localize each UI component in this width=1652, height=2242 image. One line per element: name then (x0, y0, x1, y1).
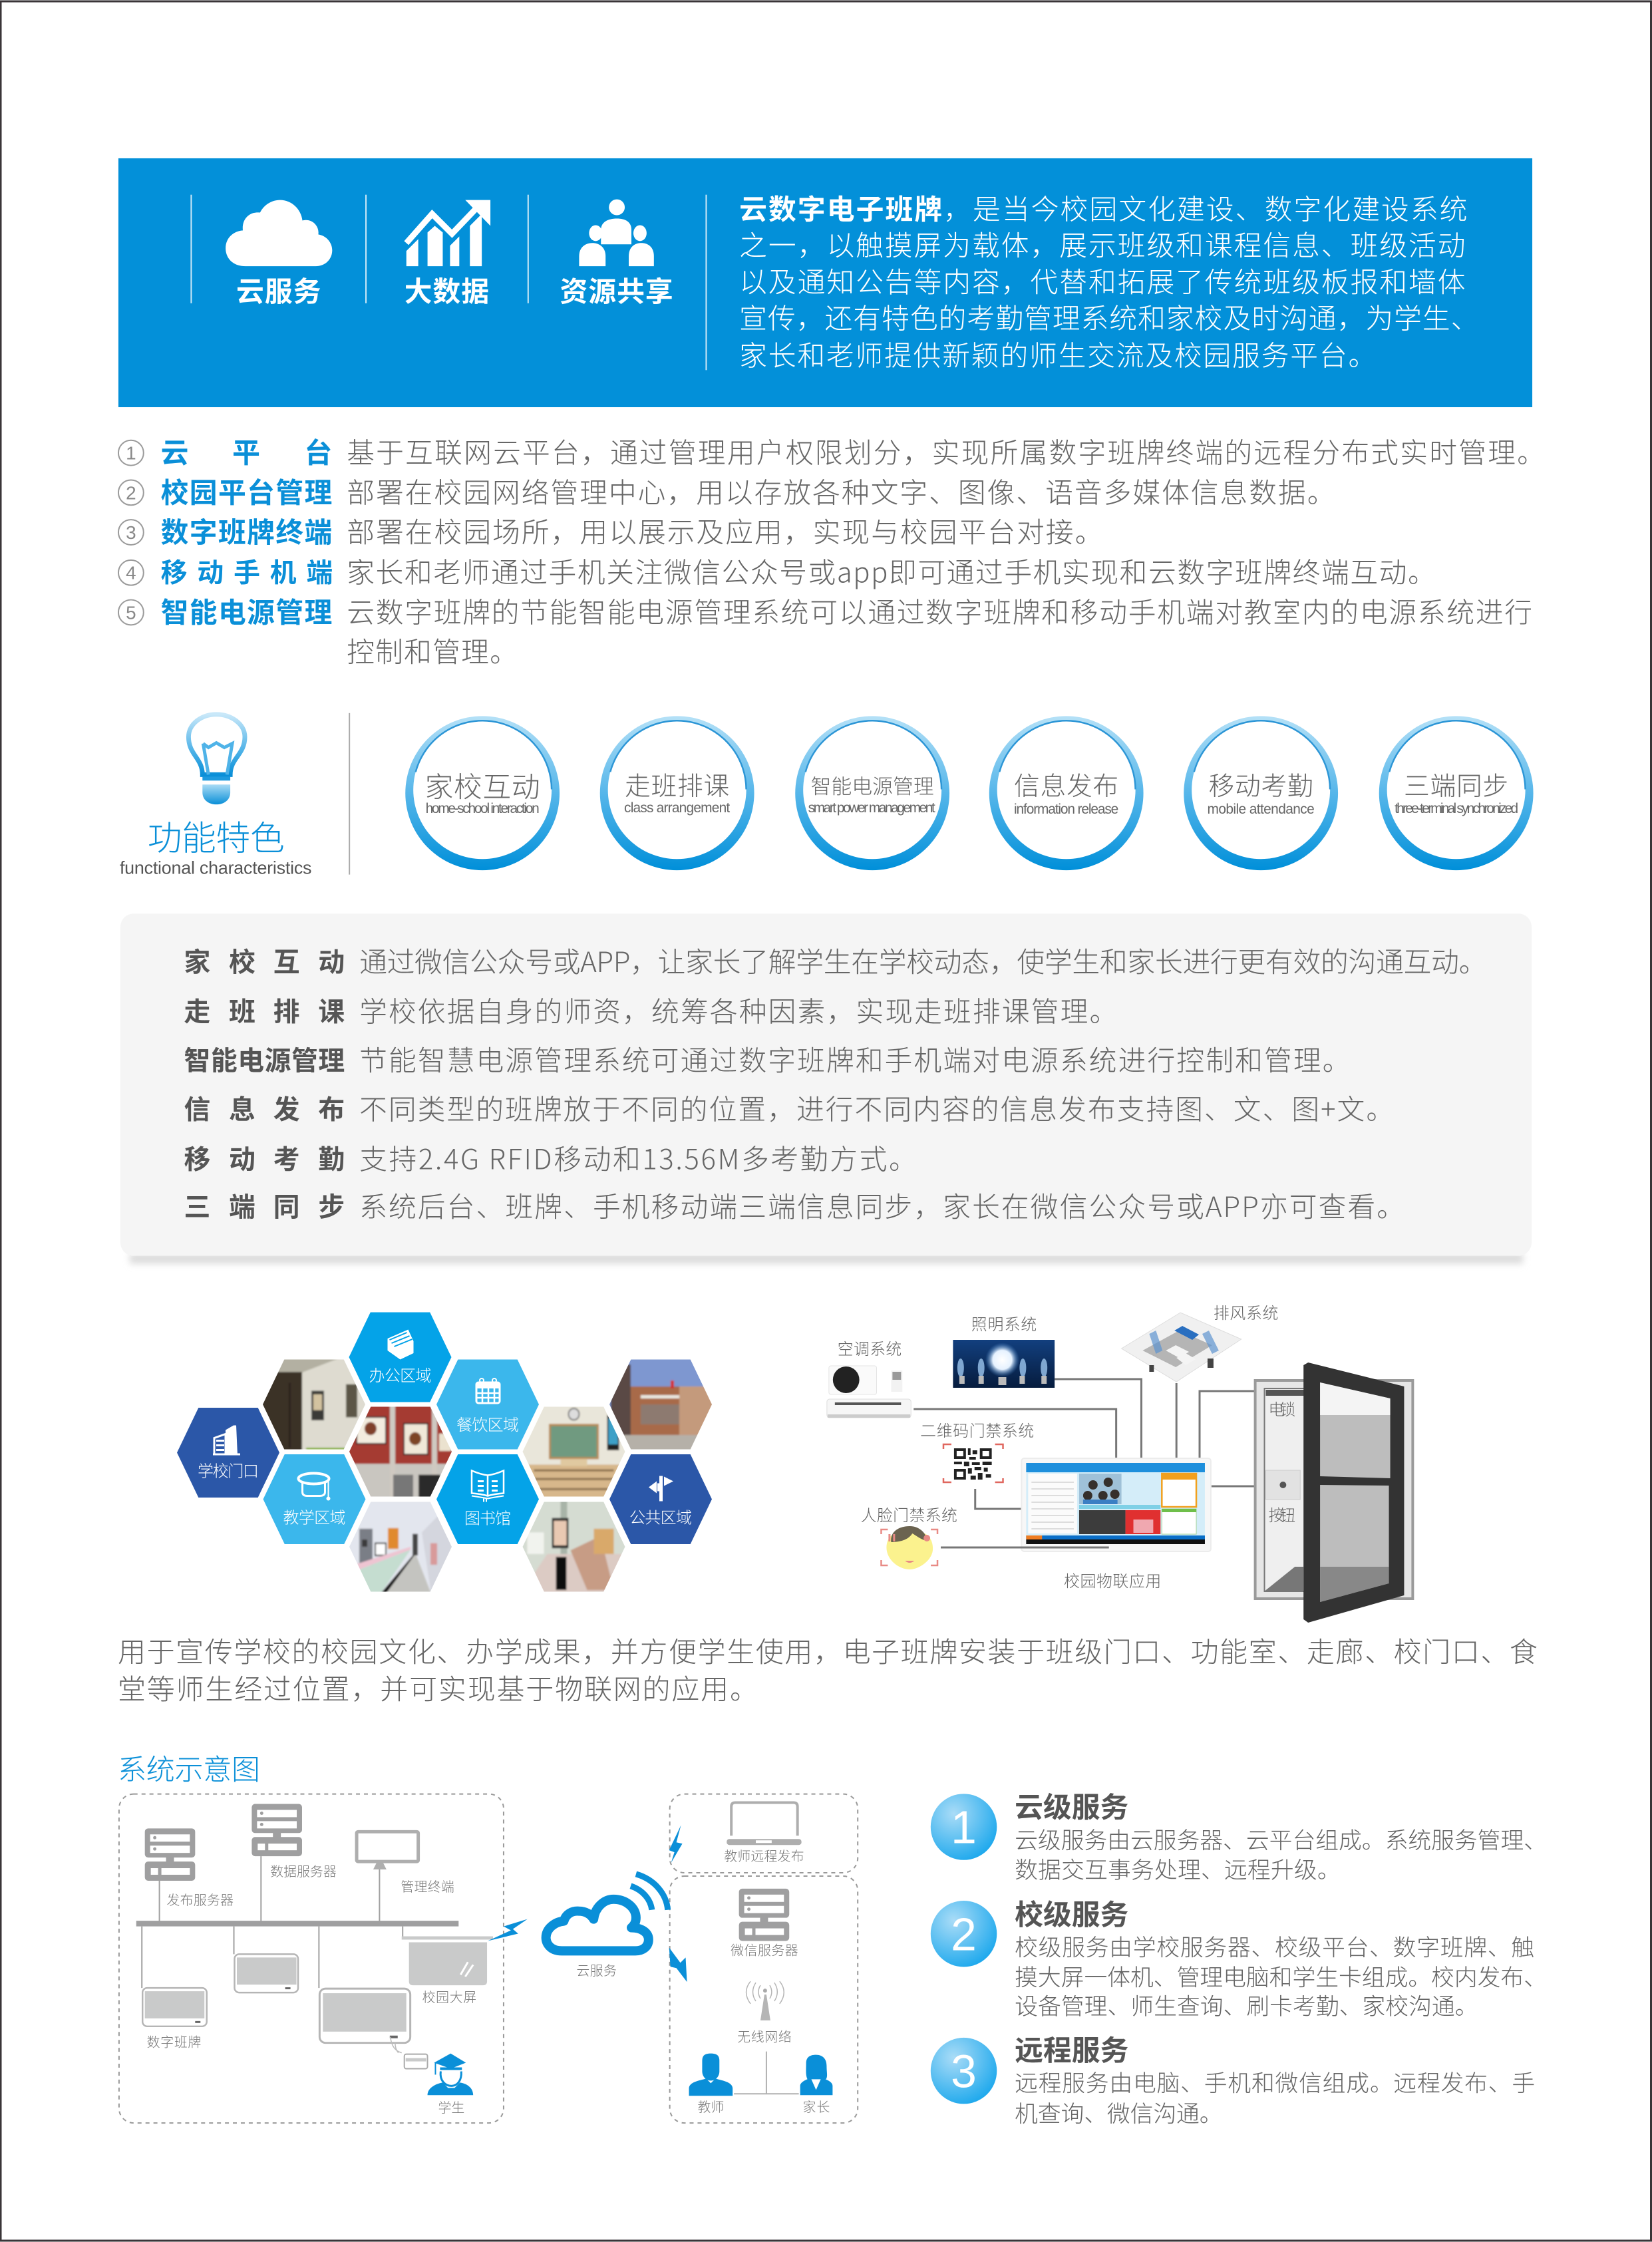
hex: 公共区域: 公共区域 (629, 1505, 692, 1527)
icon: class board 1 (142, 1988, 207, 2026)
row 4: 家长和老师通过手机关注微信公众号或app即可通过手机实现和云数字班牌终端互动。 (347, 552, 1436, 591)
service: 校级服务: 2 (951, 1909, 977, 1961)
icon: wechat server (739, 1889, 789, 1941)
service: 校级服务: 校级服务由学校服务器、校级平台、数字班牌、触 (1015, 1930, 1534, 1963)
service: 远程服务 (931, 2028, 1535, 2129)
label: 资源共享: 资源共享 (560, 270, 673, 310)
label: 二维码门禁系统: 二维码门禁系统 (920, 1418, 1034, 1441)
service: 校级服务: 设备管理、师生查询、刷卡考勤、家校沟通。 (1015, 1989, 1478, 2022)
label: 学生: 学生 (438, 2097, 464, 2116)
icon: big data chart (407, 200, 490, 266)
row 5: 控制和管理。 (347, 631, 518, 671)
hex: 公共区域 (609, 1454, 712, 1544)
row: 移动考勤: 支持2.4G RFID移动和13.56M多考勤方式。 (359, 1138, 917, 1178)
circle: 智能电源管理: smart power management (808, 800, 935, 816)
circle: 走班排课: class arrangement (624, 800, 730, 816)
icon: air conditioner (827, 1366, 911, 1418)
icon: campus big screen (402, 1937, 493, 1985)
row 5: 云数字班牌的节能智能电源管理系统可以通过数字班牌和移动手机端对教室内的电源系统进行 (347, 591, 1532, 631)
door (1255, 1362, 1412, 1623)
icon: face recognition (881, 1526, 937, 1569)
text: application description: 堂等师生经过位置，并可实现基于物联网的应用。 (118, 1667, 758, 1708)
row: 信息发布: 信息发布 (184, 1089, 345, 1127)
icon: class board 2 (235, 1954, 298, 1993)
service: 云级服务: 云级服务 (1015, 1785, 1128, 1826)
icon: parent (800, 2055, 832, 2095)
service: 校级服务: 摸大屏一体机、管理电脑和学生卡组成。校内发布、 (1015, 1959, 1547, 1993)
service: 远程服务: 远程服务 (1015, 2028, 1128, 2069)
label: 照明系统: 照明系统 (971, 1311, 1037, 1335)
row: 信息发布: 不同类型的班牌放于不同的位置，进行不同内容的信息发布支持图、文、图+文。 (359, 1088, 1394, 1128)
photo hex: school building (607, 1358, 714, 1451)
line from face (941, 1546, 1109, 1549)
circle: 信息发布: 信息发布 (1014, 766, 1118, 803)
photo hex: mall lobby (520, 1500, 627, 1593)
row 1: 基于互联网云平台，通过管理用户权限划分，实现所属数字班牌终端的远程分布式实时管理。 (347, 432, 1545, 472)
hex: 学校门口 (177, 1408, 279, 1498)
icon: publish server (145, 1828, 195, 1881)
icon: cloud (546, 1899, 649, 1951)
hex: 学校门口: 学校门口 (198, 1458, 259, 1481)
service list (931, 1785, 1547, 2129)
service: 云级服务 (931, 1785, 1547, 1885)
label: 管理终端: 管理终端 (401, 1876, 454, 1895)
label: 电锁: 电锁 (1268, 1396, 1295, 1420)
panel: intro banner (118, 158, 1532, 407)
icon: signal arcs (631, 1874, 668, 1910)
row: 走班排课: 学校依据自身的师资，统筹各种因素，实现走班排课管理。 (359, 990, 1117, 1030)
label: 家长: 家长 (803, 2096, 830, 2116)
row 2: 校园平台管理 (161, 471, 332, 511)
list: platform components (118, 432, 1545, 671)
label: 校园大屏: 校园大屏 (422, 1987, 476, 2006)
diagram: system network (119, 1794, 858, 2123)
text: intro paragraph: 宣传，还有特色的考勤管理系统和家校及时沟通，为学生、 (739, 297, 1478, 337)
label: 发布服务器: 发布服务器 (167, 1889, 234, 1909)
icon: light bulb (188, 715, 245, 804)
circle: 移动考勤: mobile attendance (1208, 802, 1315, 817)
circle: 家校互动: 家校互动 (425, 764, 540, 806)
row: 三端同步: 三端同步 (184, 1186, 345, 1224)
hex: 图书馆 (436, 1454, 539, 1544)
row: 家校互动: 家校互动 (184, 941, 345, 979)
row: 走班排课: 走班排课 (184, 991, 345, 1029)
photo hex: red wall (347, 1405, 454, 1498)
circle: 信息发布: information release (1014, 802, 1118, 817)
title: 功能特色 (148, 810, 285, 860)
row: 智能电源管理: 节能智慧电源管理系统可通过数字班牌和手机端对电源系统进行控制和管理。 (359, 1039, 1350, 1079)
icon: cloud (226, 200, 332, 266)
photo hex: hallway door (261, 1358, 367, 1451)
bus and branches (136, 1856, 458, 1988)
display: digital class board (1021, 1458, 1211, 1551)
circle: 三端同步: 三端同步 (1404, 766, 1508, 803)
list: platform components: 2 (126, 482, 136, 503)
text: application description (118, 1630, 1538, 1708)
service: 云级服务: 数据交互事务处理、远程升级。 (1015, 1852, 1341, 1885)
label: 按钮: 按钮 (1268, 1502, 1295, 1525)
service: 远程服务: 远程服务由电脑、手机和微信组成。远程发布、手 (1015, 2066, 1535, 2099)
text: intro paragraph: 之一，以触摸屏为载体，展示班级和课程信息、班级活动 (739, 224, 1466, 264)
row 4: 移动手机端 (161, 552, 333, 590)
circle: 走班排课: 走班排课 (625, 766, 729, 803)
service: 云级服务: 1 (951, 1801, 977, 1853)
title: system diagram: 系统示意图 (118, 1747, 260, 1788)
hex: 餐饮区域 (436, 1360, 539, 1449)
icon: laptop (727, 1803, 802, 1845)
wireless dashed box (670, 1876, 858, 2123)
section heading: functional characteristics (120, 713, 350, 878)
list: platform components: 3 (126, 522, 136, 543)
text: intro paragraph: 家长和老师提供新颖的师生交流及校园服务平台。 (739, 334, 1376, 374)
row: 智能电源管理: 智能电源管理 (184, 1040, 345, 1078)
connector lines (913, 1379, 1268, 1509)
line: wireless network (734, 2052, 799, 2094)
row 5 (161, 591, 1532, 671)
hex: 餐饮区域: 餐饮区域 (456, 1412, 519, 1435)
circle: 智能电源管理 (788, 705, 957, 875)
label: 微信服务器: 微信服务器 (731, 1939, 798, 1959)
circle: 信息发布 (981, 705, 1151, 875)
icon: data server (251, 1804, 302, 1856)
circle: 三端同步: three-terminal synchronized (1395, 801, 1518, 816)
service: 远程服务: 3 (951, 2046, 977, 2098)
icon: teacher (689, 2054, 733, 2096)
text: intro paragraph (739, 188, 1478, 374)
icon: student card (391, 2037, 428, 2068)
icon: bolt (488, 1919, 528, 1941)
label: 大数据: 大数据 (405, 270, 489, 310)
row 1: 云平台 (161, 432, 332, 472)
text: intro paragraph: 以及通知公告等内容，代替和拓展了传统班级板报和墙体 (739, 261, 1466, 301)
text: application description: 用于宣传学校的校园文化、办学成果，并方便学生使用，电子班牌安装于班级门口、功能室、走廊、校门口、食 (118, 1630, 1538, 1671)
label: 校园物联应用: 校园物联应用 (1064, 1568, 1161, 1591)
campus dashed box (119, 1794, 504, 2123)
row: 家校互动: 通过微信公众号或APP，让家长了解学生在学校动态，使学生和家长进行更有效的沟通互动。 (359, 941, 1486, 981)
icon: QR code (943, 1444, 1003, 1482)
list: platform components: 5 (126, 602, 136, 623)
icon: student (428, 2054, 473, 2095)
diagram: campus IoT (827, 1300, 1412, 1623)
icon: wireless tower (746, 1981, 784, 2020)
photo: light bulbs (953, 1340, 1055, 1388)
row: 移动考勤: 移动考勤 (184, 1138, 345, 1176)
icon: bolt bottom (669, 1947, 687, 1982)
subtitle: functional characteristics (120, 858, 311, 878)
hex: 办公区域: 办公区域 (369, 1362, 431, 1386)
circle: 家校互动: home-school interaction (426, 801, 540, 816)
label: 人脸门禁系统: 人脸门禁系统 (861, 1502, 957, 1525)
hex: 图书馆: 图书馆 (464, 1505, 511, 1529)
text: intro paragraph: 云数字电子班牌，是当今校园文化建设、数字化建设系统 (739, 188, 1468, 228)
icon: ventilation floorplan (1122, 1313, 1241, 1382)
row 3: 数字班牌终端 (161, 511, 332, 551)
hexagon cluster (177, 1312, 714, 1593)
list: platform components: 4 (126, 563, 136, 583)
icon: bolt top (669, 1825, 683, 1863)
photo hex: classroom (520, 1405, 627, 1498)
label: 数据服务器: 数据服务器 (270, 1861, 337, 1880)
label: 空调系统: 空调系统 (838, 1336, 902, 1359)
circle: 走班排课 (592, 705, 762, 875)
service: 云级服务: 云级服务由云服务器、云平台组成。系统服务管理、 (1015, 1822, 1547, 1855)
row 5: 智能电源管理 (161, 591, 332, 631)
circle: 家校互动 (398, 705, 567, 875)
row: 三端同步: 系统后台、班牌、手机移动端三端信息同步，家长在微信公众号或APP亦可查看。 (359, 1186, 1404, 1225)
label: 教师远程发布: 教师远程发布 (724, 1845, 804, 1865)
icon: management terminal (357, 1832, 418, 1869)
label: 教师: 教师 (697, 2096, 724, 2116)
label: 数字班牌: 数字班牌 (147, 2032, 201, 2051)
circle: 移动考勤: 移动考勤 (1209, 766, 1313, 803)
hex: 教学区域: 教学区域 (283, 1505, 346, 1527)
panel: feature details (120, 913, 1532, 1264)
circle: 三端同步 (1371, 705, 1541, 875)
circle: 移动考勤 (1176, 705, 1345, 875)
label: 云服务: 云服务 (236, 270, 321, 310)
service: 远程服务: 机查询、微信沟通。 (1015, 2096, 1223, 2129)
service: 校级服务 (931, 1892, 1547, 2022)
hex: 教学区域 (263, 1454, 366, 1544)
hex: 办公区域 (349, 1312, 451, 1402)
row 2: 部署在校园网络管理中心，用以存放各种文字、图像、语音多媒体信息数据。 (347, 471, 1335, 511)
circle: 智能电源管理: 智能电源管理 (811, 770, 934, 800)
label: 云服务: 云服务 (576, 1960, 617, 1979)
list: platform components: 1 (126, 443, 136, 464)
photo hex: corridor (347, 1500, 454, 1593)
label: 排风系统: 排风系统 (1214, 1300, 1278, 1323)
remote dashed box (670, 1794, 858, 1873)
row 3: 部署在校园场所，用以展示及应用，实现与校园平台对接。 (347, 511, 1102, 551)
icon: class board 3 (319, 1989, 411, 2043)
label: 无线网络: 无线网络 (737, 2026, 792, 2046)
icon: people sharing (579, 200, 654, 266)
service: 校级服务: 校级服务 (1015, 1892, 1128, 1933)
feature circles (398, 705, 1541, 875)
